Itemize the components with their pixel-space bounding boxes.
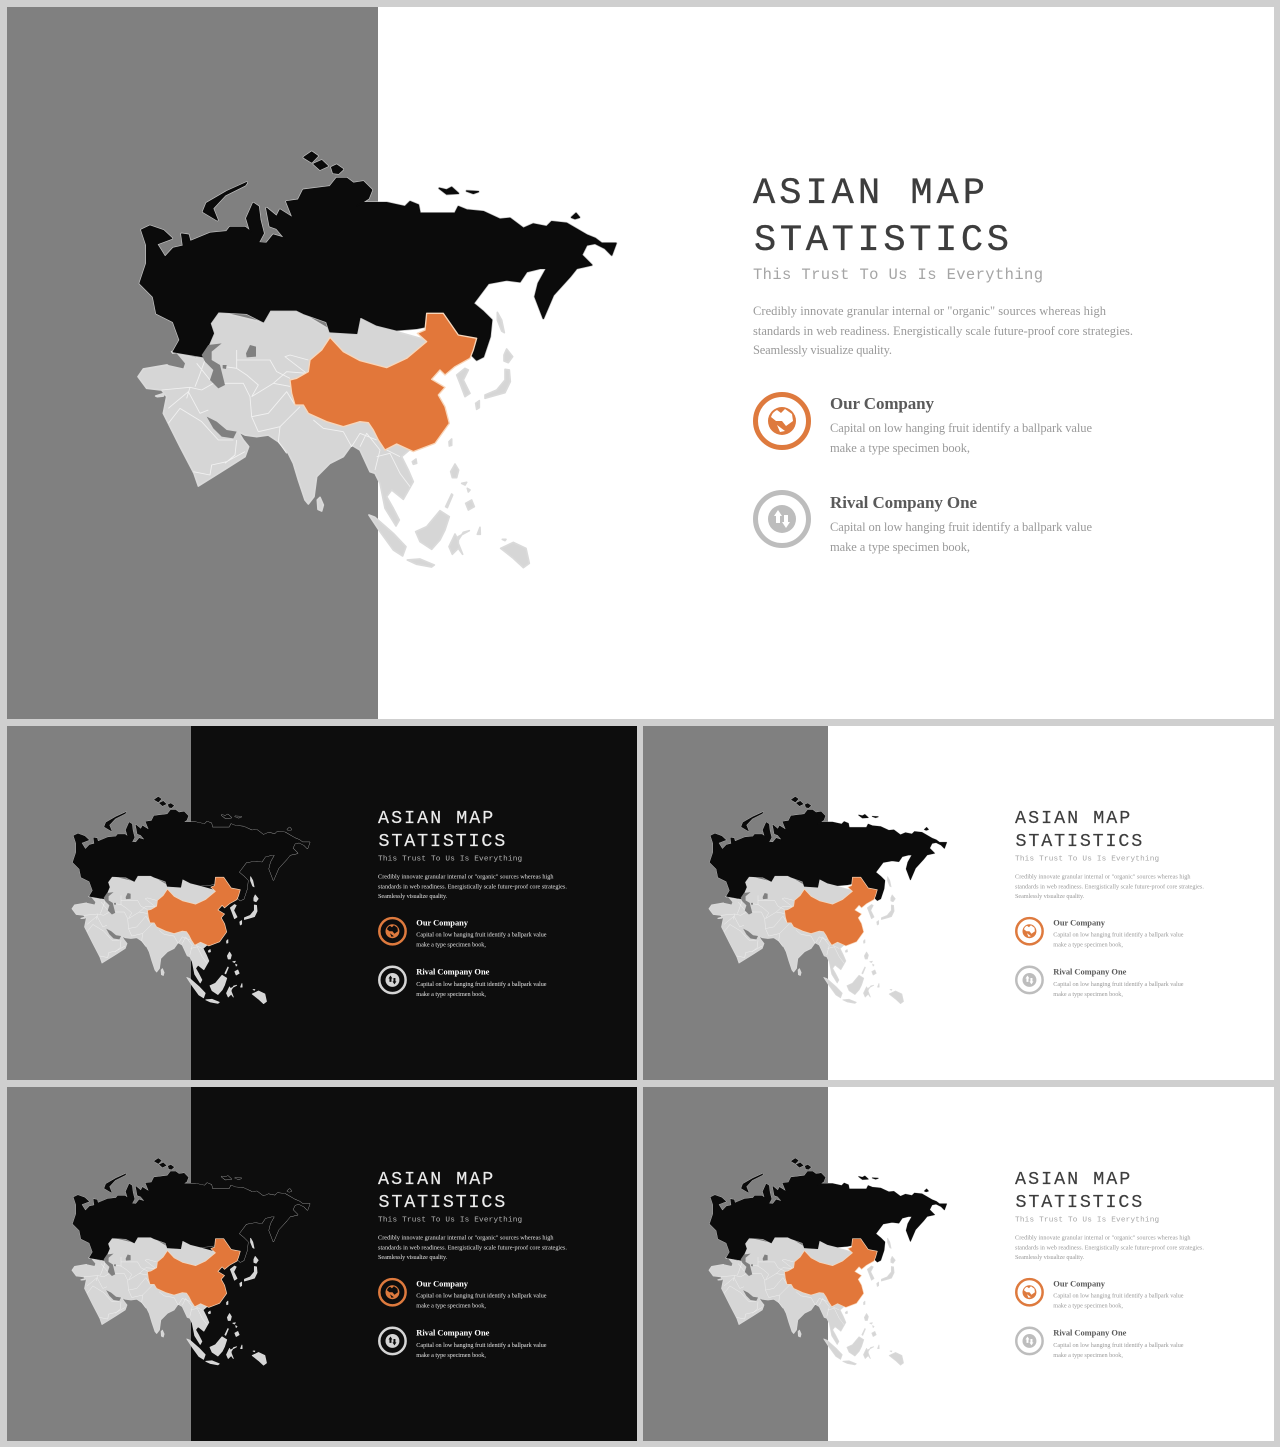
slide text and icons bbox=[1015, 808, 1204, 998]
slide text and icons: ASIAN MAP bbox=[378, 1169, 493, 1190]
South-east Asian islands bbox=[317, 439, 529, 568]
item: Rival Company One: make a type specimen book, bbox=[830, 540, 970, 554]
slide text and icons: STATISTICS bbox=[1016, 1192, 1142, 1213]
map of Asia bbox=[709, 797, 947, 1004]
slide text and icons: Rival Company One bbox=[416, 966, 490, 976]
panel: light slide top right bbox=[643, 726, 1274, 1080]
slide text and icons: This Trust To Us Is Everything bbox=[1015, 1217, 1159, 1225]
slide text and icons: Capital on low hanging fruit identify a ballpark value bbox=[1053, 981, 1184, 988]
slide text and icons: This Trust To Us Is Everything bbox=[378, 1217, 522, 1225]
title: ASIAN MAP bbox=[753, 173, 985, 215]
slide text and icons: ASIAN MAP bbox=[1015, 1169, 1130, 1190]
Russia solid fill bbox=[140, 152, 616, 360]
slide text and icons: Rival Company One bbox=[1053, 1327, 1127, 1337]
item: Our Company: Our Company bbox=[830, 394, 934, 413]
slide text and icons: STATISTICS bbox=[379, 1192, 505, 1213]
item: Our Company: Capital on low hanging fruit identify a ballpark value bbox=[830, 421, 1092, 435]
slide text and icons: Seamlessly visualize quality. bbox=[1015, 893, 1085, 900]
white slide background bbox=[643, 726, 1274, 1080]
black slide background bbox=[7, 1087, 637, 1441]
panel: light slide bottom right bbox=[643, 1087, 1274, 1441]
slide text and icons: Rival Company One bbox=[416, 1327, 490, 1337]
slide text and icons: Seamlessly visualize quality. bbox=[1015, 1254, 1085, 1261]
slide text and icons: make a type specimen book, bbox=[1053, 1352, 1123, 1359]
slide text and icons: make a type specimen book, bbox=[416, 1352, 486, 1359]
slide text and icons: Credibly innovate granular internal or "organic" sources whereas high bbox=[378, 1235, 554, 1242]
item: Rival Company One bbox=[830, 493, 1092, 554]
grey side panel bbox=[643, 1087, 828, 1441]
slide text and icons: make a type specimen book, bbox=[1053, 991, 1123, 998]
item: Our Company: make a type specimen book, bbox=[830, 441, 970, 455]
map: Russia highlighted in black bbox=[140, 152, 616, 360]
slide text and icons: Our Company bbox=[1053, 917, 1106, 927]
Japan bbox=[476, 312, 513, 409]
title bbox=[753, 173, 1009, 262]
slide text and icons: ASIAN MAP bbox=[378, 808, 493, 829]
grey side panel bbox=[643, 726, 828, 1080]
slide text and icons: STATISTICS bbox=[1016, 831, 1142, 852]
item: Our Company bbox=[830, 394, 1092, 455]
slide text and icons: Rival Company One bbox=[1053, 966, 1127, 976]
slide text and icons bbox=[1015, 1169, 1204, 1359]
grey side panel bbox=[7, 1087, 191, 1441]
item: Rival Company One: Rival Company One bbox=[830, 493, 977, 512]
slide text and icons: Seamlessly visualize quality. bbox=[378, 1254, 448, 1261]
Cyprus bbox=[156, 393, 164, 397]
panel: dark slide bottom left bbox=[7, 1087, 637, 1441]
slide text and icons: Capital on low hanging fruit identify a ballpark value bbox=[416, 1342, 547, 1349]
slide text and icons bbox=[378, 808, 567, 998]
slide text and icons: make a type specimen book, bbox=[1053, 942, 1123, 949]
slide text and icons: Capital on low hanging fruit identify a ballpark value bbox=[1053, 932, 1184, 939]
slide text and icons: This Trust To Us Is Everything bbox=[1015, 856, 1159, 864]
body paragraph bbox=[753, 304, 1133, 357]
slide text and icons: make a type specimen book, bbox=[1053, 1303, 1123, 1310]
icon: exchange arrows bbox=[756, 492, 808, 546]
map: inland seas bbox=[165, 343, 256, 438]
item: Rival Company One: Capital on low hanging fruit identify a ballpark value bbox=[830, 520, 1092, 534]
panel: dark slide top left bbox=[7, 726, 637, 1080]
slide text and icons: Credibly innovate granular internal or "organic" sources whereas high bbox=[378, 874, 554, 881]
panel: large slide bbox=[7, 7, 1274, 719]
slide text and icons: Capital on low hanging fruit identify a ballpark value bbox=[416, 932, 547, 939]
slide text and icons: standards in web readiness. Energistically scale future-proof core strategies. bbox=[378, 1244, 567, 1251]
slide text and icons: make a type specimen book, bbox=[416, 1303, 486, 1310]
slide text and icons: Our Company bbox=[416, 1278, 469, 1288]
icon: globe bbox=[756, 394, 808, 448]
slide text and icons: This Trust To Us Is Everything bbox=[378, 856, 522, 864]
slide text and icons: Our Company bbox=[416, 917, 469, 927]
map of Asia bbox=[709, 1159, 947, 1365]
black slide background bbox=[7, 726, 637, 1080]
subtitle: This Trust To Us Is Everything bbox=[753, 266, 1043, 284]
Country borders bbox=[162, 350, 410, 487]
map of Asia bbox=[138, 152, 616, 568]
slide text and icons: Capital on low hanging fruit identify a ballpark value bbox=[416, 1293, 547, 1300]
map: China highlighted in orange bbox=[290, 313, 477, 452]
title: STATISTICS bbox=[754, 220, 1009, 262]
slide text and icons: Seamlessly visualize quality. bbox=[378, 893, 448, 900]
slide text and icons: make a type specimen book, bbox=[416, 991, 486, 998]
slide text and icons bbox=[378, 1169, 567, 1359]
map of Asia bbox=[72, 1159, 310, 1365]
Korea bbox=[457, 368, 470, 397]
Russia light outline bbox=[140, 152, 616, 360]
map of Asia bbox=[72, 797, 310, 1004]
slide text and icons: STATISTICS bbox=[379, 831, 505, 852]
grey side panel bbox=[7, 726, 191, 1080]
map: grey Asian countries bbox=[138, 310, 529, 568]
slide text and icons: standards in web readiness. Energistically scale future-proof core strategies. bbox=[378, 883, 567, 890]
slide text and icons: Capital on low hanging fruit identify a ballpark value bbox=[1053, 1342, 1184, 1349]
grey side panel bbox=[7, 7, 378, 719]
slide text and icons: make a type specimen book, bbox=[416, 942, 486, 949]
body paragraph: Credibly innovate granular internal or "organic" sources whereas high bbox=[753, 304, 1107, 318]
slide text and icons: standards in web readiness. Energistically scale future-proof core strategies. bbox=[1015, 883, 1204, 890]
body paragraph: Seamlessly visualize quality. bbox=[753, 343, 892, 357]
slide text and icons: Capital on low hanging fruit identify a ballpark value bbox=[1053, 1293, 1184, 1300]
slide text and icons: Our Company bbox=[1053, 1278, 1106, 1288]
slide text and icons: standards in web readiness. Energistically scale future-proof core strategies. bbox=[1015, 1244, 1204, 1251]
body paragraph: standards in web readiness. Energistically scale future-proof core strategies. bbox=[753, 324, 1133, 338]
slide text and icons: Credibly innovate granular internal or "organic" sources whereas high bbox=[1015, 1235, 1191, 1242]
slide text and icons: Capital on low hanging fruit identify a ballpark value bbox=[416, 981, 547, 988]
slide text and icons: ASIAN MAP bbox=[1015, 808, 1130, 829]
white slide background bbox=[7, 7, 1274, 719]
white slide background bbox=[643, 1087, 1274, 1441]
slide text and icons: Credibly innovate granular internal or "organic" sources whereas high bbox=[1015, 874, 1191, 881]
